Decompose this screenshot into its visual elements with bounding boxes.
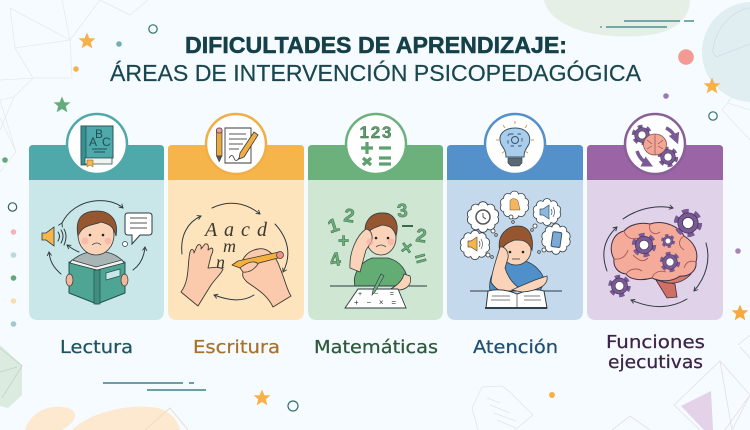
illustration: brain with gears [604, 207, 708, 307]
illustration: boy doing maths: × [399, 237, 414, 260]
illustration: boy doing maths: + − × = [354, 298, 396, 307]
label: Funciones ejecutivas: ejecutivas [608, 352, 703, 373]
panel: Matemáticas [308, 114, 443, 320]
panel: Escritura [168, 114, 304, 320]
icon: book ABC: C [102, 135, 111, 149]
panel: Funciones ejecutivas [587, 114, 723, 320]
illustration: boy doing maths: = [413, 248, 429, 271]
label: Funciones ejecutivas [606, 332, 705, 373]
label: Lectura: Lectura [60, 337, 133, 358]
illustration: boy doing maths: 4 [328, 249, 343, 272]
illustration: hands writing: n [216, 252, 225, 272]
icon: numbers and operators: 123 [360, 123, 392, 142]
illustration: boy doing maths: 1 [325, 215, 342, 238]
icon: book ABC: B [95, 127, 103, 141]
illustration: hands writing [181, 203, 291, 307]
illustration: distracted boy [460, 191, 570, 308]
label: Escritura: Escritura [193, 337, 280, 358]
illustration: boy reading [42, 201, 152, 304]
icon: book ABC: A [89, 135, 97, 149]
title [110, 32, 642, 86]
illustration: hands writing: m [223, 236, 236, 256]
title: DIFICULTADES DE APRENDIZAJE: [185, 32, 567, 58]
icon: brain and gears [625, 114, 685, 174]
label: Matemáticas: Matemáticas [314, 337, 438, 358]
illustration: boy doing maths: + − = [358, 291, 394, 298]
illustration: boy doing maths: + [338, 231, 349, 252]
label: Atención: Atención [473, 337, 558, 358]
icon: numbers and operators [346, 114, 406, 174]
panel: Lectura [29, 114, 164, 320]
illustration: boy doing maths [325, 201, 429, 308]
label: Funciones ejecutivas: Funciones [606, 332, 705, 353]
illustration: boy doing maths: 2 [414, 225, 428, 248]
illustration: hands writing: A a c d [203, 219, 268, 241]
icon: book ABC [67, 114, 127, 174]
panel: Atención [447, 114, 583, 320]
icon: pencil and paper [206, 114, 266, 174]
illustration: boy doing maths: 2 [342, 205, 356, 228]
title: ÁREAS DE INTERVENCIÓN PSICOPEDAGÓGICA [110, 60, 642, 86]
illustration: boy doing maths: 3 [396, 201, 409, 222]
icon: light bulb [485, 114, 545, 174]
